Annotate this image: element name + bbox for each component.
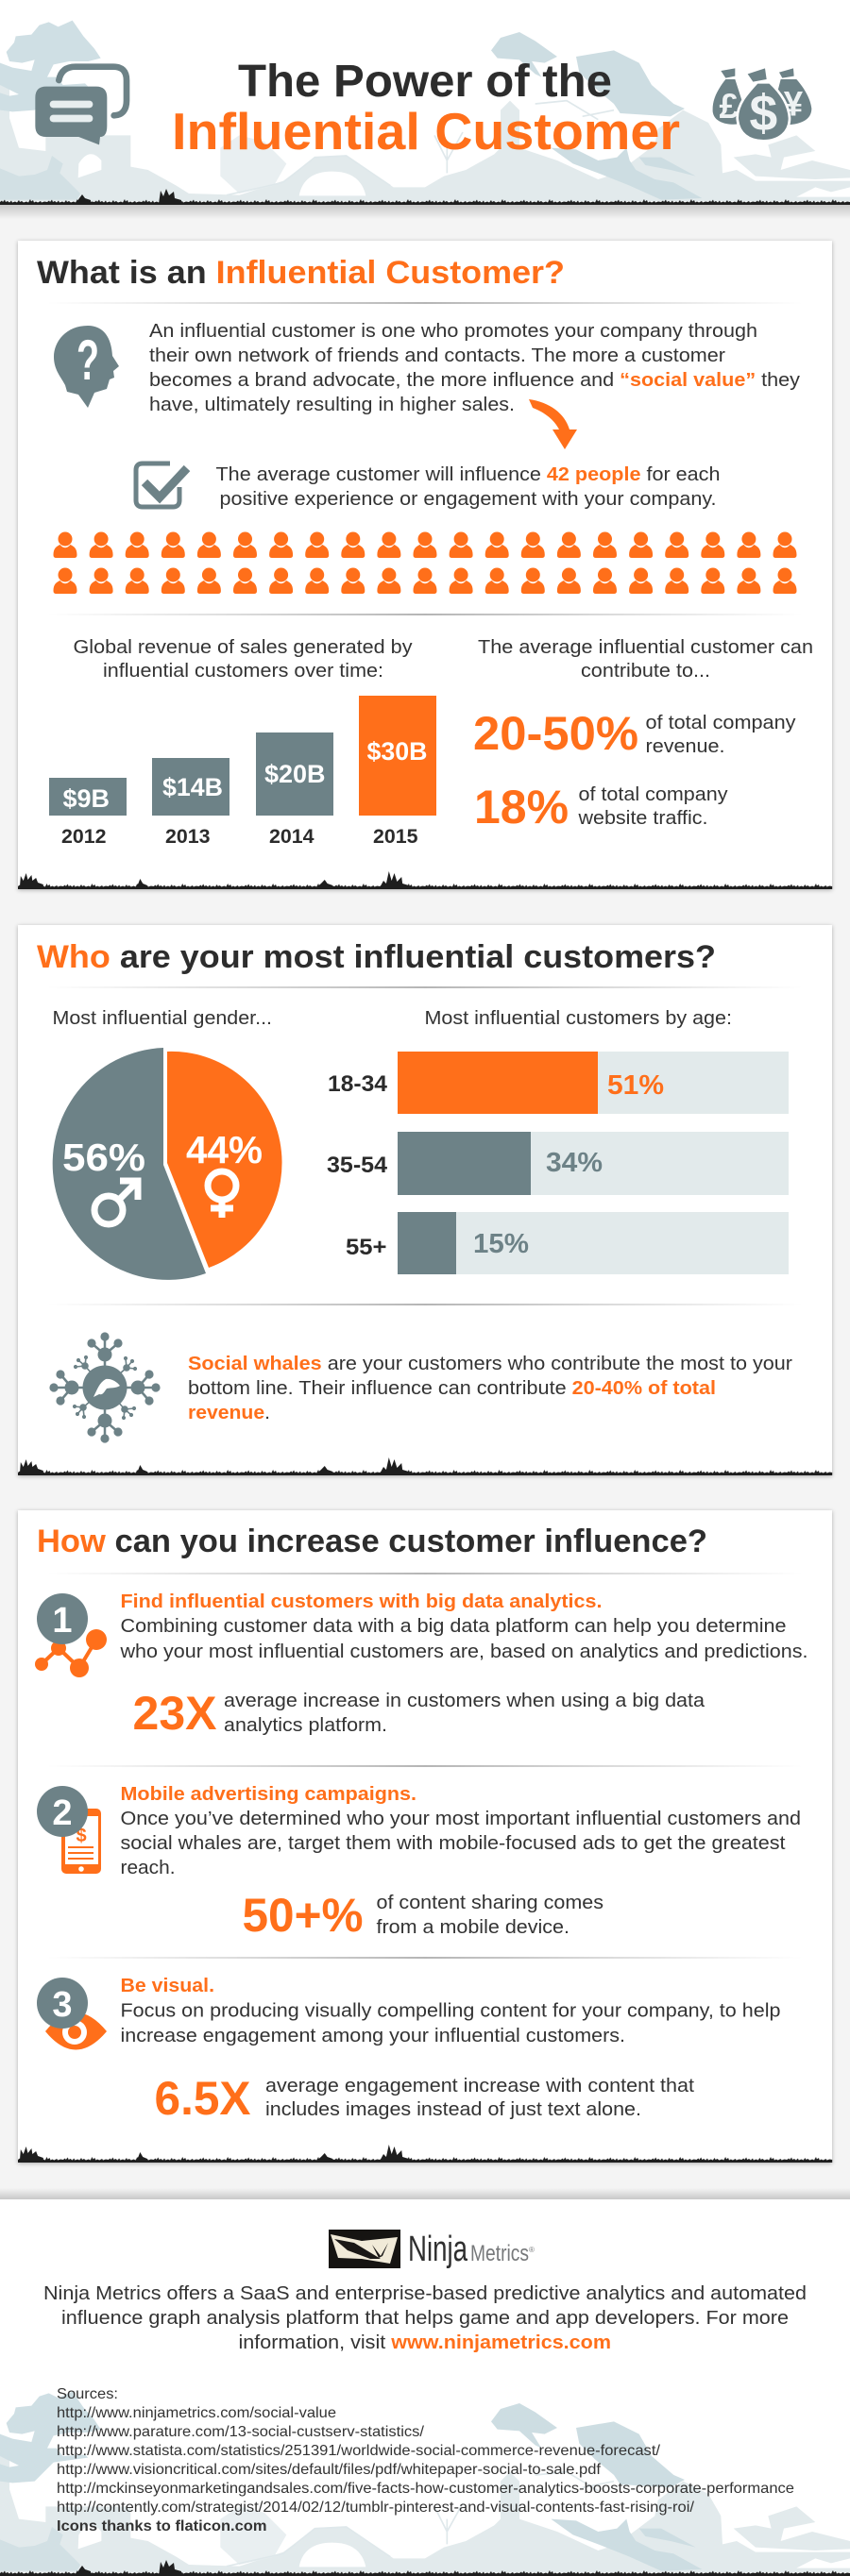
- bar chart: revenue: 2014: [269, 826, 314, 848]
- bar chart: age: 18-34: [328, 1071, 388, 1097]
- social whales text: Social whales are your customers who contribute the most to your: [188, 1353, 792, 1374]
- bar chart: revenue: 2012: [61, 826, 106, 848]
- step 3 text: increase engagement among your influential customers.: [121, 2025, 625, 2046]
- stat: 20-50% revenue: of total company: [646, 712, 796, 733]
- step 2 icon: phone and number: 2: [52, 1793, 73, 1833]
- icon: head with question mark: [54, 326, 119, 408]
- step 2 icon: phone and number: [37, 1786, 101, 1874]
- logo: Ninja Metrics: [329, 2230, 535, 2269]
- definition text: have, ultimately resulting in higher sales.: [149, 394, 515, 415]
- stat: 20-50% revenue: revenue.: [646, 735, 725, 757]
- heading: who: Who are your most influential customers?: [37, 939, 716, 975]
- company description: Ninja Metrics offers a SaaS and enterprise-based predictive analytics and automated: [43, 2282, 807, 2304]
- header grass strip: [0, 189, 850, 205]
- icon: speech bubbles: [35, 67, 127, 144]
- stat: 23X: analytics platform.: [224, 1714, 387, 1736]
- social whales text: [188, 1353, 792, 1423]
- people icons: 42 people: [53, 532, 797, 594]
- revenue chart heading: Global revenue of sales generated by: [74, 636, 413, 658]
- panel: what is an influential customer: [18, 241, 832, 889]
- stat: 50+%: [242, 1889, 604, 1942]
- average customer text: positive experience or engagement with your company.: [219, 488, 716, 510]
- stat: 6.5X: [155, 2072, 694, 2125]
- gender subheading: Most influential gender...: [53, 1007, 272, 1029]
- definition text: An influential customer is one who promotes your company through: [149, 320, 757, 342]
- bar chart: revenue: 2013: [165, 826, 210, 848]
- panel: who are your most influential customers: [18, 925, 832, 1475]
- icon: male symbol: [94, 1181, 138, 1224]
- step 3 icon: eye and number: 3: [52, 1985, 73, 2025]
- panel: how can you increase customer influence: [18, 1510, 832, 2163]
- step 1 text: Find influential customers with big data analytics.: [121, 1591, 603, 1612]
- contribution heading: The average influential customer can: [478, 636, 813, 658]
- sources list: Sources:: [57, 2386, 118, 2402]
- contribution heading: contribute to...: [581, 660, 710, 682]
- definition text: becomes a brand advocate, the more influence and “social value” they: [149, 369, 801, 391]
- pie chart: gender: 44%: [186, 1128, 263, 1171]
- sources list: http://www.visioncritical.com/sites/default/files/pdf/whitepaper-social-to-sale.pdf: [57, 2462, 602, 2478]
- stat: 6.5X: includes images instead of just text alone.: [265, 2098, 641, 2120]
- stat: 23X: [132, 1687, 706, 1740]
- heading: what is: What is an Influential Customer?: [37, 255, 565, 291]
- icon: head with question mark: ?: [76, 328, 99, 392]
- pie chart: gender: [53, 1048, 282, 1280]
- heading: how: How can you increase customer influence?: [37, 1524, 707, 1559]
- step 1 text: [119, 1591, 808, 1662]
- step 3 text: Be visual.: [121, 1976, 214, 1996]
- contribution heading: [478, 636, 813, 682]
- step 2 text: reach.: [121, 1857, 176, 1878]
- company description: influence graph analysis platform that helps game and app developers. For more: [61, 2307, 789, 2329]
- sources list: [57, 2386, 794, 2534]
- stat: 18% traffic: [474, 781, 728, 833]
- step 2 icon: phone and number: $: [76, 1826, 87, 1846]
- arrow: [529, 399, 577, 449]
- logo: Ninja Metrics: ®: [529, 2246, 535, 2254]
- header background scene: [0, 21, 850, 201]
- stat: 18% traffic: website traffic.: [577, 807, 708, 829]
- step 1 icon: network nodes and number: [35, 1593, 107, 1677]
- step 1 text: Combining customer data with a big data platform can help you determine: [121, 1615, 786, 1637]
- definition text: their own network of friends and contacts. The more a customer: [149, 345, 725, 366]
- sources list: Icons thanks to flaticon.com: [57, 2518, 266, 2534]
- step 3 text: [121, 1976, 780, 2046]
- sources list: http://www.ninjametrics.com/social-value: [57, 2405, 336, 2421]
- footer grass strip: [0, 2560, 850, 2576]
- icon: money bags: £: [719, 87, 739, 126]
- stat: 50+%: 50+%: [242, 1889, 363, 1942]
- step 2 text: Once you’ve determined who your most important influential customers and: [121, 1808, 801, 1829]
- step 2 text: social whales are, target them with mobile-focused ads to get the greatest: [121, 1832, 786, 1854]
- title: [172, 57, 680, 160]
- definition text: [149, 320, 801, 415]
- step 3 icon: eye and number: [37, 1978, 107, 2050]
- bar chart: revenue: $9B: [62, 784, 110, 813]
- step 1 icon: network nodes and number: 1: [52, 1601, 73, 1641]
- bar chart: age: 55+: [346, 1235, 387, 1260]
- icon: money bags: $: [749, 86, 777, 142]
- average customer text: [215, 463, 721, 510]
- stat: 18% traffic: of total company: [578, 783, 728, 805]
- bar chart: age: [327, 1052, 789, 1274]
- pie chart: gender: 56%: [62, 1136, 145, 1179]
- sources list: http://www.statista.com/statistics/251391/worldwide-social-commerce-revenue-forecast/: [57, 2443, 661, 2459]
- footer background scene: [0, 2392, 850, 2572]
- stat: 20-50% revenue: 20-50%: [473, 707, 638, 760]
- company description: [43, 2282, 807, 2353]
- icon: money bags: [713, 68, 811, 142]
- stat: 50+%: from a mobile device.: [376, 1916, 570, 1938]
- icon: social whale network: [49, 1332, 161, 1443]
- stat: 18% traffic: 18%: [474, 781, 569, 833]
- footer panel: [0, 2188, 850, 2576]
- title: The Power of the: [238, 57, 612, 107]
- bar chart: age: 15%: [473, 1229, 529, 1259]
- logo: Ninja Metrics: Metrics: [470, 2241, 529, 2266]
- icon: checkbox: [136, 463, 187, 507]
- bar chart: age: 35-54: [327, 1153, 388, 1178]
- bar chart: age: 34%: [546, 1148, 603, 1178]
- icon: female symbol: [208, 1171, 236, 1218]
- stat: 6.5X: average engagement increase with content that: [265, 2075, 694, 2096]
- social whales text: bottom line. Their influence can contribute 20-40% of total: [188, 1377, 716, 1399]
- company description: information, visit www.ninjametrics.com: [238, 2332, 611, 2353]
- sources list: http://www.parature.com/13-social-custserv-statistics/: [57, 2424, 425, 2440]
- title: Influential Customer: [172, 102, 680, 160]
- revenue chart heading: influential customers over time:: [103, 660, 383, 682]
- stat: 23X: 23X: [132, 1687, 217, 1740]
- step 2 text: Mobile advertising campaigns.: [121, 1784, 416, 1805]
- bar chart: revenue: $14B: [162, 773, 223, 801]
- stat: 20-50% revenue: [473, 707, 796, 760]
- average customer text: The average customer will influence 42 people for each: [215, 463, 721, 485]
- bar chart: revenue: $30B: [366, 737, 427, 766]
- step 3 text: Focus on producing visually compelling content for your company, to help: [121, 1999, 780, 2022]
- bar chart: revenue: [49, 696, 436, 848]
- stat: 50+%: of content sharing comes: [376, 1892, 604, 1913]
- social whales text: revenue.: [188, 1402, 270, 1423]
- revenue chart heading: [74, 636, 413, 682]
- icon: money bags: ¥: [784, 85, 804, 124]
- stat: 23X: average increase in customers when using a big data: [224, 1690, 706, 1711]
- sources list: http://contently.com/strategist/2014/02/12/tumblr-pinterest-and-visual-contents-fast-rising-roi/: [57, 2500, 695, 2516]
- step 2 text: [121, 1784, 801, 1878]
- step 1 text: who your most influential customers are, based on analytics and predictions.: [119, 1641, 808, 1662]
- logo: Ninja Metrics: Ninja: [408, 2230, 468, 2269]
- stat: 6.5X: 6.5X: [155, 2072, 251, 2125]
- bar chart: age: 51%: [607, 1070, 664, 1101]
- bar chart: revenue: $20B: [264, 760, 325, 788]
- sources list: http://mckinseyonmarketingandsales.com/five-facts-how-customer-analytics-boosts-corporate-performance: [57, 2481, 794, 2497]
- age subheading: Most influential customers by age:: [425, 1007, 732, 1029]
- bar chart: revenue: 2015: [373, 826, 418, 848]
